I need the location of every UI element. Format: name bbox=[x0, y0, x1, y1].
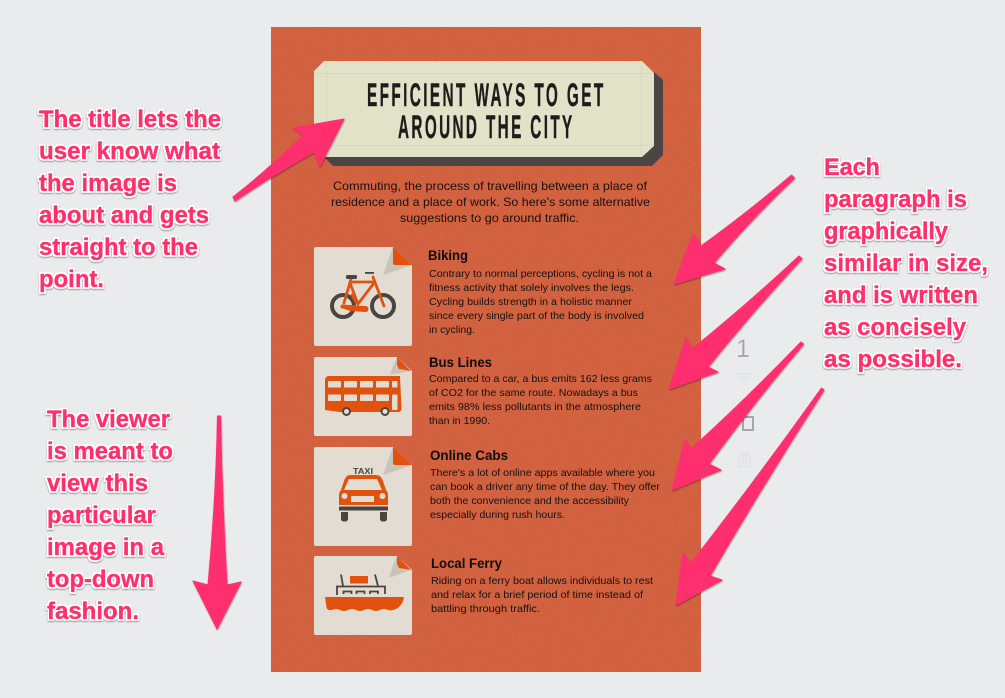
panel: biking bbox=[314, 247, 652, 346]
arrow: to bus lines paragraph bbox=[669, 256, 802, 389]
callout: paragraph note: as concisely bbox=[824, 314, 966, 341]
intro paragraph: suggestions to go around traffic. bbox=[400, 211, 579, 225]
callout: title note: the image is bbox=[39, 170, 177, 197]
callout: title note bbox=[39, 106, 221, 293]
heading: biking: Biking bbox=[428, 248, 468, 263]
arrow: to online cabs paragraph bbox=[672, 342, 804, 490]
callout: title note: user know what bbox=[39, 138, 220, 165]
callout: reading direction note: fashion. bbox=[47, 598, 139, 625]
arrow: to local ferry paragraph bbox=[676, 388, 824, 605]
icon: bus card bbox=[314, 357, 412, 436]
callout: reading direction note: top-down bbox=[47, 566, 154, 593]
panel: bus lines bbox=[314, 355, 652, 436]
text: local ferry: battling through traffic. bbox=[431, 603, 540, 615]
text: biking: Contrary to normal perceptions, cycling is not a bbox=[429, 268, 652, 280]
text: biking: since every single part of the body is involved bbox=[429, 310, 644, 322]
text: bus lines: than in 1990. bbox=[429, 415, 490, 427]
text: biking bbox=[429, 268, 652, 336]
callout: title note: The title lets the bbox=[39, 106, 221, 133]
heading: bus lines: Bus Lines bbox=[429, 355, 492, 370]
text: local ferry: and relax for a brief period of time instead of bbox=[431, 589, 643, 601]
heading: local ferry: Local Ferry bbox=[431, 556, 502, 571]
text: bus lines: Compared to a car, a bus emits 162 less grams bbox=[429, 373, 652, 385]
title bbox=[367, 77, 606, 145]
intro paragraph: Commuting, the process of travelling between a place of bbox=[333, 179, 648, 193]
text: bus lines: of CO2 for the same route. Nowadays a bus bbox=[429, 387, 638, 399]
text: online cabs: There's a lot of online apps available where you bbox=[430, 467, 655, 479]
icon: ferry card bbox=[314, 556, 412, 635]
arrow: top-down reading direction bbox=[193, 416, 241, 629]
arrow: to biking paragraph bbox=[674, 175, 794, 284]
text: online cabs: can book a driver any time of the day. They offer bbox=[430, 481, 661, 493]
icon: taxi card bbox=[314, 447, 412, 546]
text: online cabs: especially during rush hours. bbox=[430, 509, 565, 521]
panel: online cabs bbox=[314, 447, 661, 546]
callout: paragraph note: Each bbox=[824, 154, 880, 181]
callout: title note: about and gets bbox=[39, 202, 209, 229]
background UI widgets: 1 bbox=[736, 335, 750, 363]
icon: bicycle card bbox=[314, 247, 412, 346]
text: local ferry bbox=[431, 575, 653, 615]
callout: title note: straight to the bbox=[39, 234, 198, 261]
poster panel bbox=[271, 27, 701, 672]
callout: reading direction note bbox=[47, 406, 173, 625]
callout: paragraph note: paragraph is bbox=[824, 186, 967, 213]
callout: reading direction note: is meant to bbox=[47, 438, 173, 465]
text: online cabs bbox=[430, 467, 661, 521]
panel: local ferry bbox=[314, 556, 653, 635]
icon: taxi card: TAXI bbox=[353, 466, 373, 476]
callout: reading direction note: image in a bbox=[47, 534, 164, 561]
callout: paragraph note bbox=[824, 154, 988, 373]
heading: online cabs: Online Cabs bbox=[430, 448, 508, 463]
callout: reading direction note: view this bbox=[47, 470, 148, 497]
callout: reading direction note: particular bbox=[47, 502, 156, 529]
text: biking: Cycling builds strength in a holistic manner bbox=[429, 296, 633, 308]
arrow: to title bbox=[233, 119, 344, 201]
callout: title note: point. bbox=[39, 266, 104, 293]
callout: paragraph note: similar in size, bbox=[824, 250, 988, 277]
text: biking: fitness activity that solely involves the legs. bbox=[429, 282, 634, 294]
callout: reading direction note: The viewer bbox=[47, 406, 170, 433]
callout: paragraph note: graphically bbox=[824, 218, 948, 245]
title plaque bbox=[314, 61, 663, 166]
title plaque: EFFICIENT WAYS TO GET bbox=[367, 77, 606, 113]
text: local ferry: Riding on a ferry boat allows individuals to rest bbox=[431, 575, 653, 587]
callout: paragraph note: as possible. bbox=[824, 346, 962, 373]
intro paragraph: residence and a place of work. So here's some alternative bbox=[331, 195, 650, 209]
intro paragraph bbox=[331, 179, 650, 225]
text: bus lines bbox=[429, 373, 652, 427]
text: bus lines: emits 98% less pollutants in the atmosphere bbox=[429, 401, 641, 413]
title: AROUND THE CITY bbox=[398, 109, 575, 145]
text: online cabs: both the convenience and the accessibility bbox=[430, 495, 630, 507]
callout: paragraph note: and is written bbox=[824, 282, 978, 309]
text: biking: in cycling. bbox=[429, 324, 475, 336]
background UI widgets bbox=[735, 320, 753, 467]
